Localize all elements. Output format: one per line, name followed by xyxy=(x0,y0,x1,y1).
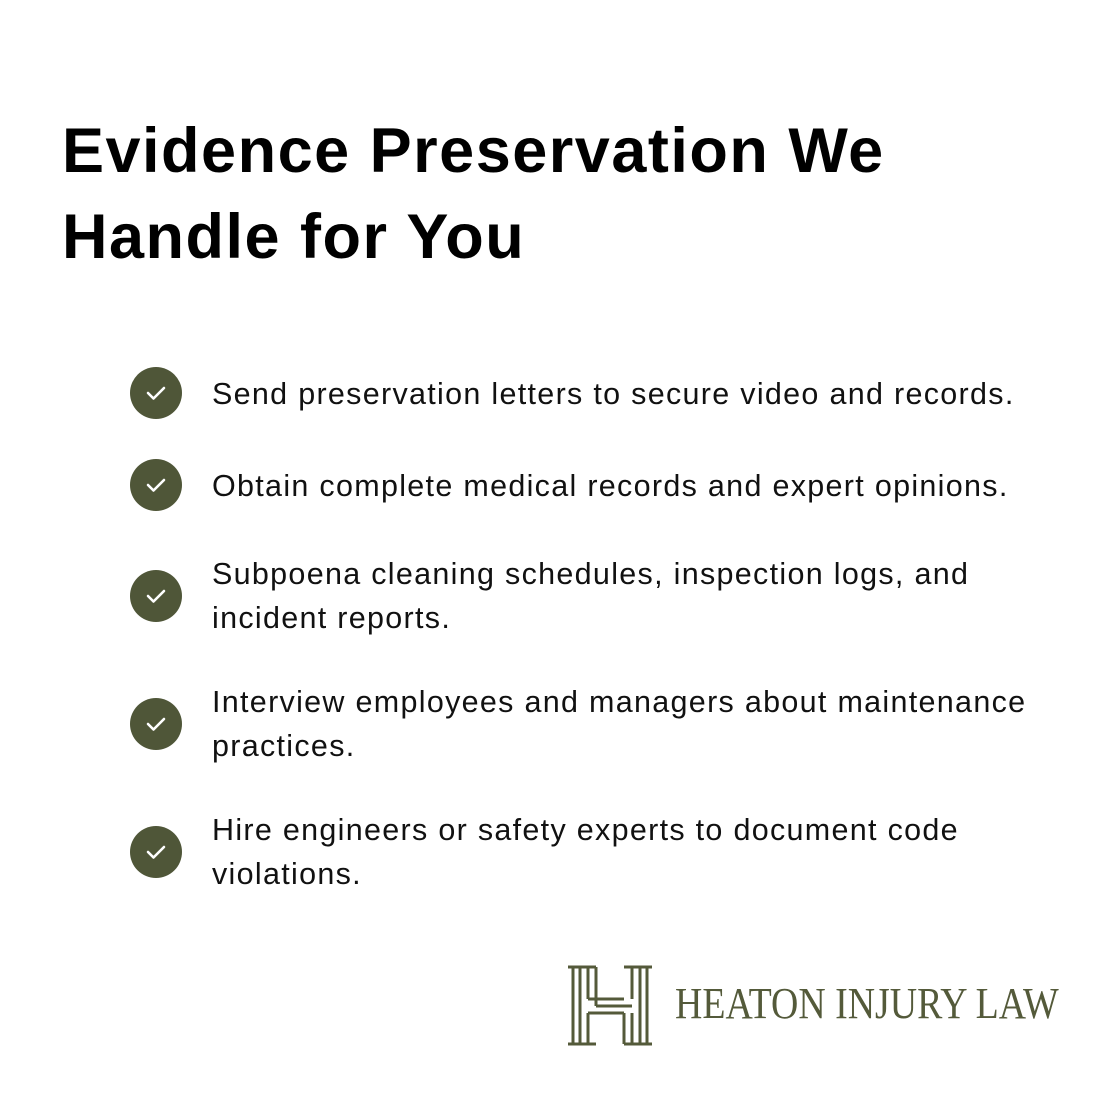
text xyxy=(212,813,959,891)
text: Send preservation letters to secure video and records. xyxy=(212,377,1015,411)
logo text: HEATON INJURY LAW xyxy=(675,979,1059,1028)
title: Evidence Preservation We xyxy=(62,116,885,186)
text: Obtain complete medical records and expert opinions. xyxy=(212,469,1009,503)
item 5 xyxy=(130,813,959,891)
item 1 xyxy=(130,367,1015,419)
title xyxy=(62,116,885,272)
text: incident reports. xyxy=(212,601,451,635)
text xyxy=(212,685,1026,763)
text: Hire engineers or safety experts to document code xyxy=(212,813,959,847)
icon: check xyxy=(130,698,182,750)
item 3 xyxy=(130,557,969,635)
item 2 xyxy=(130,459,1009,511)
item 4 xyxy=(130,685,1026,763)
icon: check xyxy=(130,826,182,878)
text: violations. xyxy=(212,857,362,891)
text: practices. xyxy=(212,729,356,763)
logo icon: H xyxy=(568,966,652,1046)
icon: check xyxy=(130,570,182,622)
text xyxy=(212,557,969,635)
logo xyxy=(568,966,1059,1046)
text: Subpoena cleaning schedules, inspection logs, and xyxy=(212,557,969,591)
title: Handle for You xyxy=(62,202,525,272)
text: Interview employees and managers about maintenance xyxy=(212,685,1026,719)
icon: check xyxy=(130,367,182,419)
icon: check xyxy=(130,459,182,511)
